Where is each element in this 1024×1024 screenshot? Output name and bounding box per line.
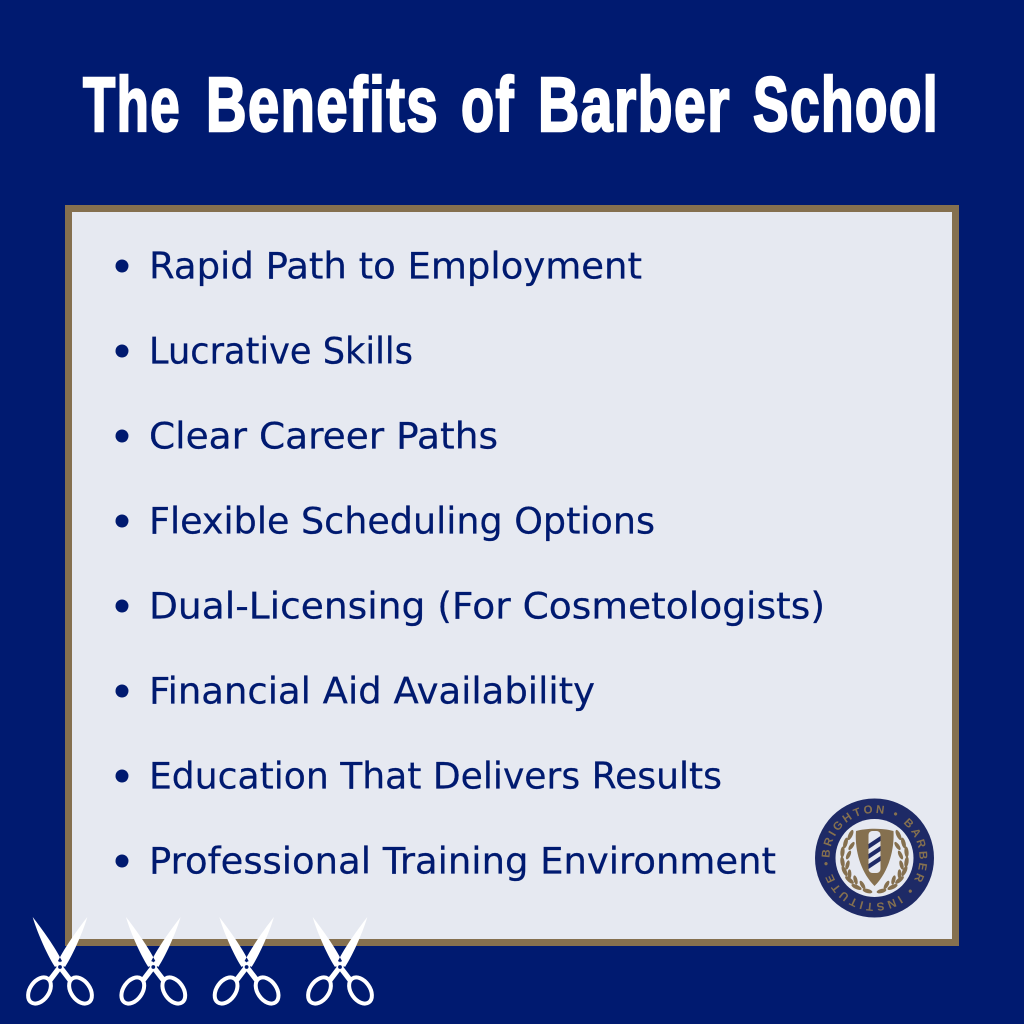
logo laurel wreath (840, 829, 909, 894)
title: of (461, 62, 515, 148)
list item: Financial Aid Availability: Financial Aid Availability (149, 670, 595, 712)
list item: Dual-Licensing: Dual-Licensing (For Cosmetologists) (149, 584, 825, 628)
icon: scissors 3 (210, 917, 283, 1008)
title: The (83, 62, 181, 148)
list item: Flexible Scheduling Options: Flexible Scheduling Options (149, 500, 655, 542)
title (83, 62, 939, 148)
list item: Education That Delivers Results: Education That Delivers Results (149, 754, 722, 798)
icon: scissors 2 (117, 917, 190, 1008)
logo: Brighton Barber Institute seal (815, 798, 934, 918)
panel: benefits list (68, 208, 956, 942)
icon: scissors 1 (23, 917, 97, 1008)
title: School (753, 62, 939, 148)
list item: Lucrative Skills: Lucrative Skills (149, 330, 413, 372)
list item: Professional Training Environment: Professional Training Environment (149, 840, 776, 882)
list item: Rapid Path to Employment: Rapid Path to Employment (149, 244, 642, 288)
title: Barber (538, 62, 731, 148)
logo barber pole (868, 831, 880, 873)
logo shield (856, 829, 894, 886)
icon: scissors 4 (303, 917, 377, 1008)
list item: Clear Career Paths: Clear Career Paths (149, 414, 498, 458)
logo ring text: BRIGHTON • BARBER • INSTITUTE • (822, 805, 928, 911)
title: Benefits (206, 62, 439, 148)
